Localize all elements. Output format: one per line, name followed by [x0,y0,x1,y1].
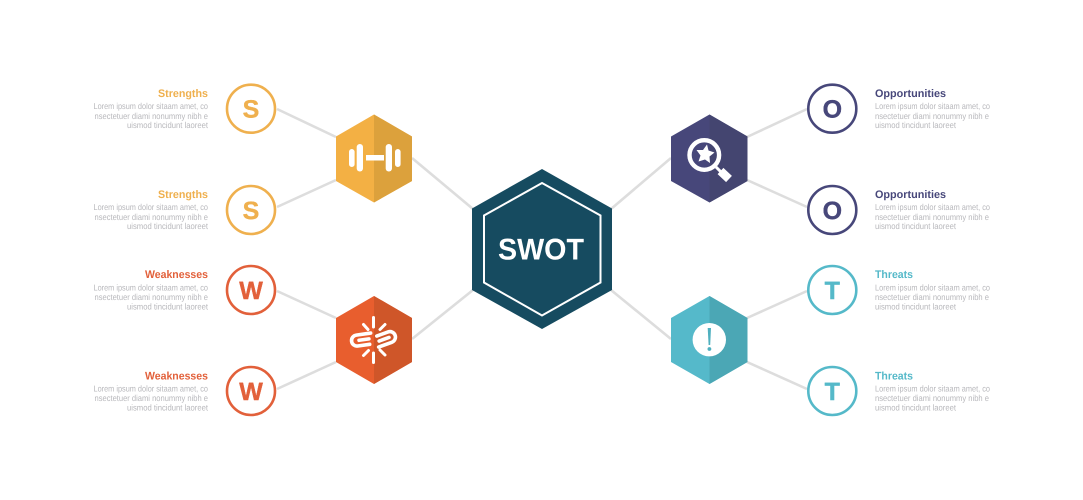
badge O [808,186,856,234]
threats text [875,269,990,311]
weaknesses text [94,269,209,311]
strengths text: uismod tincidunt laoreet [127,120,209,130]
badge T [808,266,856,314]
badge T [808,367,856,415]
threats text: Lorem ipsum dolor sitaam amet, co [875,384,990,394]
strengths text [94,88,209,130]
badge S: S [243,197,259,225]
strengths text: Lorem ipsum dolor sitaam amet, co [94,101,208,111]
opportunities hexagon with magnifier icon [671,114,748,202]
threats item 1 [808,266,990,314]
strengths item 1 [94,85,275,133]
strengths text: uismod tincidunt laoreet [127,221,209,231]
opportunities text: nsectetuer diami nonummy nibh e [875,212,989,222]
badge W: W [239,378,263,406]
weaknesses text: Weaknesses [145,370,208,382]
weaknesses item 2 [94,367,275,415]
weaknesses text: Weaknesses [145,269,208,281]
weaknesses hexagon with broken link icon [336,296,412,384]
weaknesses text: Lorem ipsum dolor sitaam amet, co [94,282,208,292]
strengths text [94,189,209,231]
opportunities text: Opportunities [875,88,946,100]
connector lines [277,109,807,389]
opportunities item 2 [808,186,990,234]
opportunities text: nsectetuer diami nonummy nibh e [875,111,989,121]
badge O [808,85,856,133]
opportunities text: Lorem ipsum dolor sitaam amet, co [875,101,990,111]
threats hexagon with alert icon [671,296,748,384]
badge T: T [825,277,840,305]
threats text [875,370,990,413]
badge W [227,367,275,415]
threats text: nsectetuer diami nonummy nibh e [875,393,989,403]
weaknesses text: nsectetuer diami nonummy nibh e [94,393,208,403]
threats text: Lorem ipsum dolor sitaam amet, co [875,282,990,292]
badge S: S [243,96,259,124]
opportunities text [875,88,990,130]
strengths text: nsectetuer diami nonummy nibh e [94,111,208,121]
threats text: uismod tincidunt laoreet [875,403,957,413]
strengths text: Strengths [158,88,208,100]
threats item 2 [808,367,990,415]
opportunities text: Opportunities [875,189,946,201]
badge S [227,85,275,133]
weaknesses text: Lorem ipsum dolor sitaam amet, co [94,384,208,394]
badge W: W [239,277,263,305]
strengths hexagon with dumbbell icon [336,114,412,202]
opportunities text: uismod tincidunt laoreet [875,120,957,130]
badge T: T [825,378,840,406]
opportunities text [875,189,990,231]
weaknesses text: nsectetuer diami nonummy nibh e [94,292,208,302]
strengths text: nsectetuer diami nonummy nibh e [94,212,208,222]
strengths text: Lorem ipsum dolor sitaam amet, co [94,202,208,212]
strengths text: Strengths [158,189,208,201]
strengths item 2 [94,186,275,234]
opportunities item 1 [808,85,990,133]
weaknesses item 1 [94,266,275,314]
badge W [227,266,275,314]
badge O: O [823,96,842,124]
badge O: O [823,197,842,225]
threats text: Threats [875,370,913,382]
central SWOT hexagon [472,169,612,329]
weaknesses text: uismod tincidunt laoreet [127,403,209,413]
weaknesses text [94,370,209,413]
threats text: uismod tincidunt laoreet [875,301,957,311]
opportunities text: Lorem ipsum dolor sitaam amet, co [875,202,990,212]
weaknesses text: uismod tincidunt laoreet [127,301,209,311]
threats text: nsectetuer diami nonummy nibh e [875,292,989,302]
threats text: Threats [875,269,913,281]
opportunities text: uismod tincidunt laoreet [875,221,957,231]
badge S [227,186,275,234]
central SWOT hexagon: SWOT [498,234,584,266]
